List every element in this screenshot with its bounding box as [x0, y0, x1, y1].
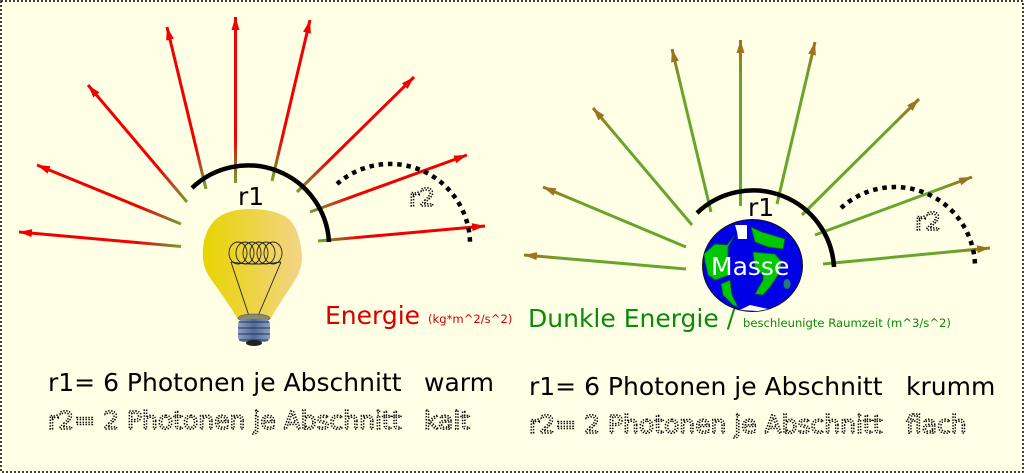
- text: r1 line: r1= 6 Photonen je Abschnitt: [529, 372, 883, 401]
- unit: Energie: (kg*m^2/s^2): [428, 312, 512, 326]
- icon: earth: [702, 220, 802, 312]
- icon: light bulb: [203, 209, 302, 346]
- label r1: r1: [238, 182, 264, 211]
- unit: beschleunigte Raumzeit: beschleunigte Raumzeit (m^3/s^2): [743, 316, 951, 330]
- text: flach: flach: [906, 410, 967, 439]
- arc r2: [337, 164, 470, 243]
- text: krumm: krumm: [906, 372, 995, 401]
- green spacetime arrows: [524, 40, 990, 269]
- text: r2 dotted: r2= 2 Photonen je Abschnitt: [529, 410, 883, 439]
- heading: Energie: Energie: [325, 301, 420, 330]
- panel: light bulb energy: [19, 17, 512, 435]
- arc r1: [697, 190, 834, 267]
- label: Masse: Masse: [711, 252, 789, 281]
- arc r1: [192, 165, 329, 242]
- label r2: r2: [915, 207, 941, 236]
- text: kalt: kalt: [424, 406, 470, 435]
- panel: mass dark energy: [524, 40, 995, 439]
- heading: Dunkle Energie: Dunkle Energie /: [528, 304, 736, 333]
- arc r2: [841, 187, 975, 267]
- label r1: r1: [748, 193, 774, 222]
- text: r1 line: r1= 6 Photonen je Abschnitt: [48, 368, 402, 397]
- text: r2 dotted: r2= 2 Photonen je Abschnitt: [48, 406, 402, 435]
- label r2: r2: [409, 183, 435, 212]
- text: warm: warm: [424, 368, 494, 397]
- red photon arrows: [19, 17, 485, 246]
